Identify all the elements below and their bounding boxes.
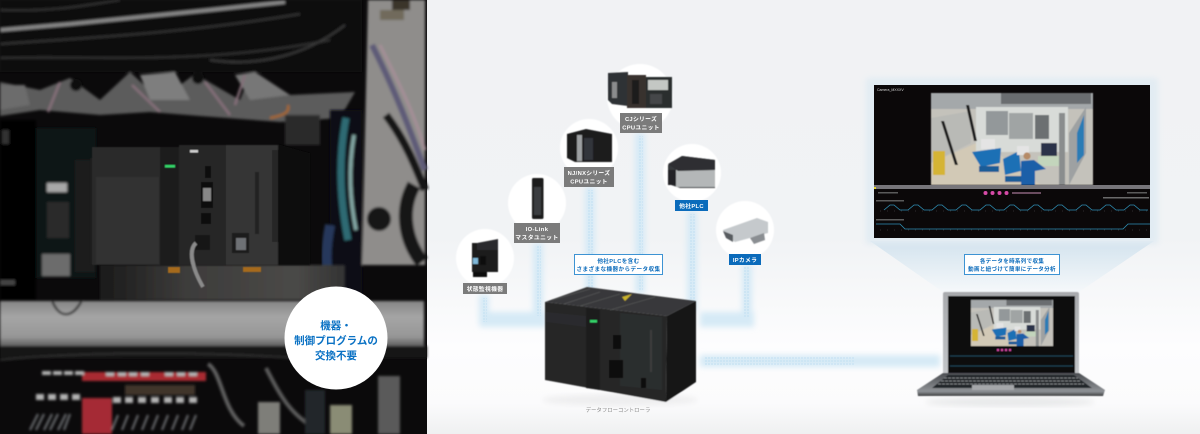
device: NJ/NX series CPU unit: CPUユニット <box>570 178 608 186</box>
device: other-company PLC: 他社PLC <box>679 202 704 210</box>
laptop <box>917 292 1105 407</box>
device: condition monitoring unit: 状態監視機器 <box>467 285 503 293</box>
photo: control panel with controller installed <box>0 0 427 434</box>
callout circle <box>284 286 388 390</box>
callout: data collection: さまざまな機器からデータ収集 <box>577 265 660 273</box>
left DIN modules <box>0 120 96 300</box>
callout: time-series analysis <box>964 254 1060 274</box>
device: CJ series CPU unit: CJシリーズ <box>625 115 657 123</box>
device: condition monitoring unit <box>456 229 514 294</box>
device: IO-Link master unit: IO-Link <box>526 227 549 233</box>
callout: data collection: 他社PLCを含む <box>597 257 640 265</box>
callout: data collection <box>574 254 662 274</box>
controller caption: データフローコントローラ <box>586 406 650 414</box>
top cable bundle <box>0 0 362 145</box>
screen glow <box>866 78 1158 244</box>
callout: time-series analysis: 動画と紐づけて簡単にデータ分析 <box>968 265 1056 273</box>
device: other-company PLC <box>663 144 721 211</box>
device: CJ series CPU unit <box>607 64 673 133</box>
device: NJ/NX series CPU unit <box>560 119 618 187</box>
data flow controller <box>542 287 698 406</box>
projection beam to laptop <box>870 241 1154 292</box>
large monitor view <box>874 85 1150 238</box>
controller in panel <box>90 144 310 287</box>
device: IP camera: IPカメラ <box>733 257 757 264</box>
large monitor view: Camera_MXXXV <box>877 88 904 92</box>
right side panel with wiring <box>326 0 425 300</box>
signal chart lines <box>876 205 1150 230</box>
device: IP camera <box>716 201 774 265</box>
device: IO-Link master unit <box>508 174 566 243</box>
callout: time-series analysis: 各データを時系列で収集 <box>980 257 1044 265</box>
callout circle: 機器・ <box>320 319 352 332</box>
data flow lines <box>479 133 940 367</box>
callout circle: 制御プログラムの <box>294 334 378 347</box>
lower terminal blocks <box>30 364 400 434</box>
shelf beneath controller <box>100 265 345 300</box>
device: IO-Link master unit: マスタユニット <box>515 234 559 242</box>
callout circle: 交換不要 <box>315 349 357 362</box>
playback controls <box>984 191 1008 195</box>
device: CJ series CPU unit: CPUユニット <box>622 124 660 132</box>
silver duct <box>0 300 427 362</box>
device: NJ/NX series CPU unit: NJ/NXシリーズ <box>568 169 610 177</box>
